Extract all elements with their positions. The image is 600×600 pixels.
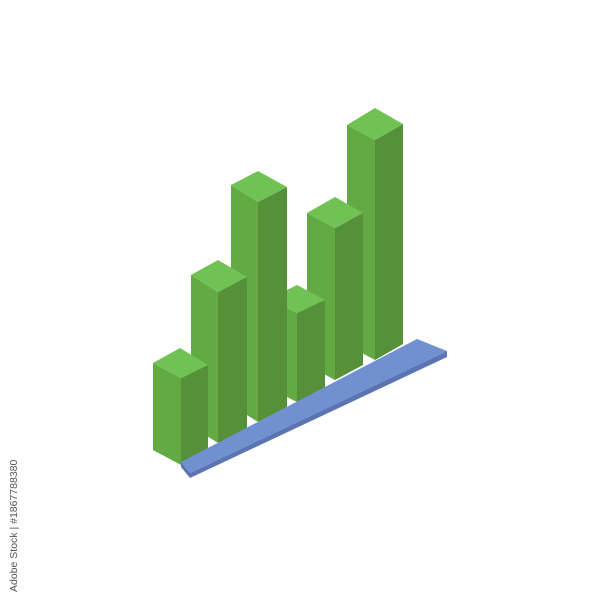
base plate [181,339,447,478]
bar 1 [153,348,208,465]
bar 2 [191,260,247,443]
bar 4 [269,285,325,402]
stock id text: Adobe Stock | #1867788380 [8,460,20,592]
bar 6 [347,108,403,360]
bar 3 [231,171,287,422]
bar 5 [307,197,363,380]
